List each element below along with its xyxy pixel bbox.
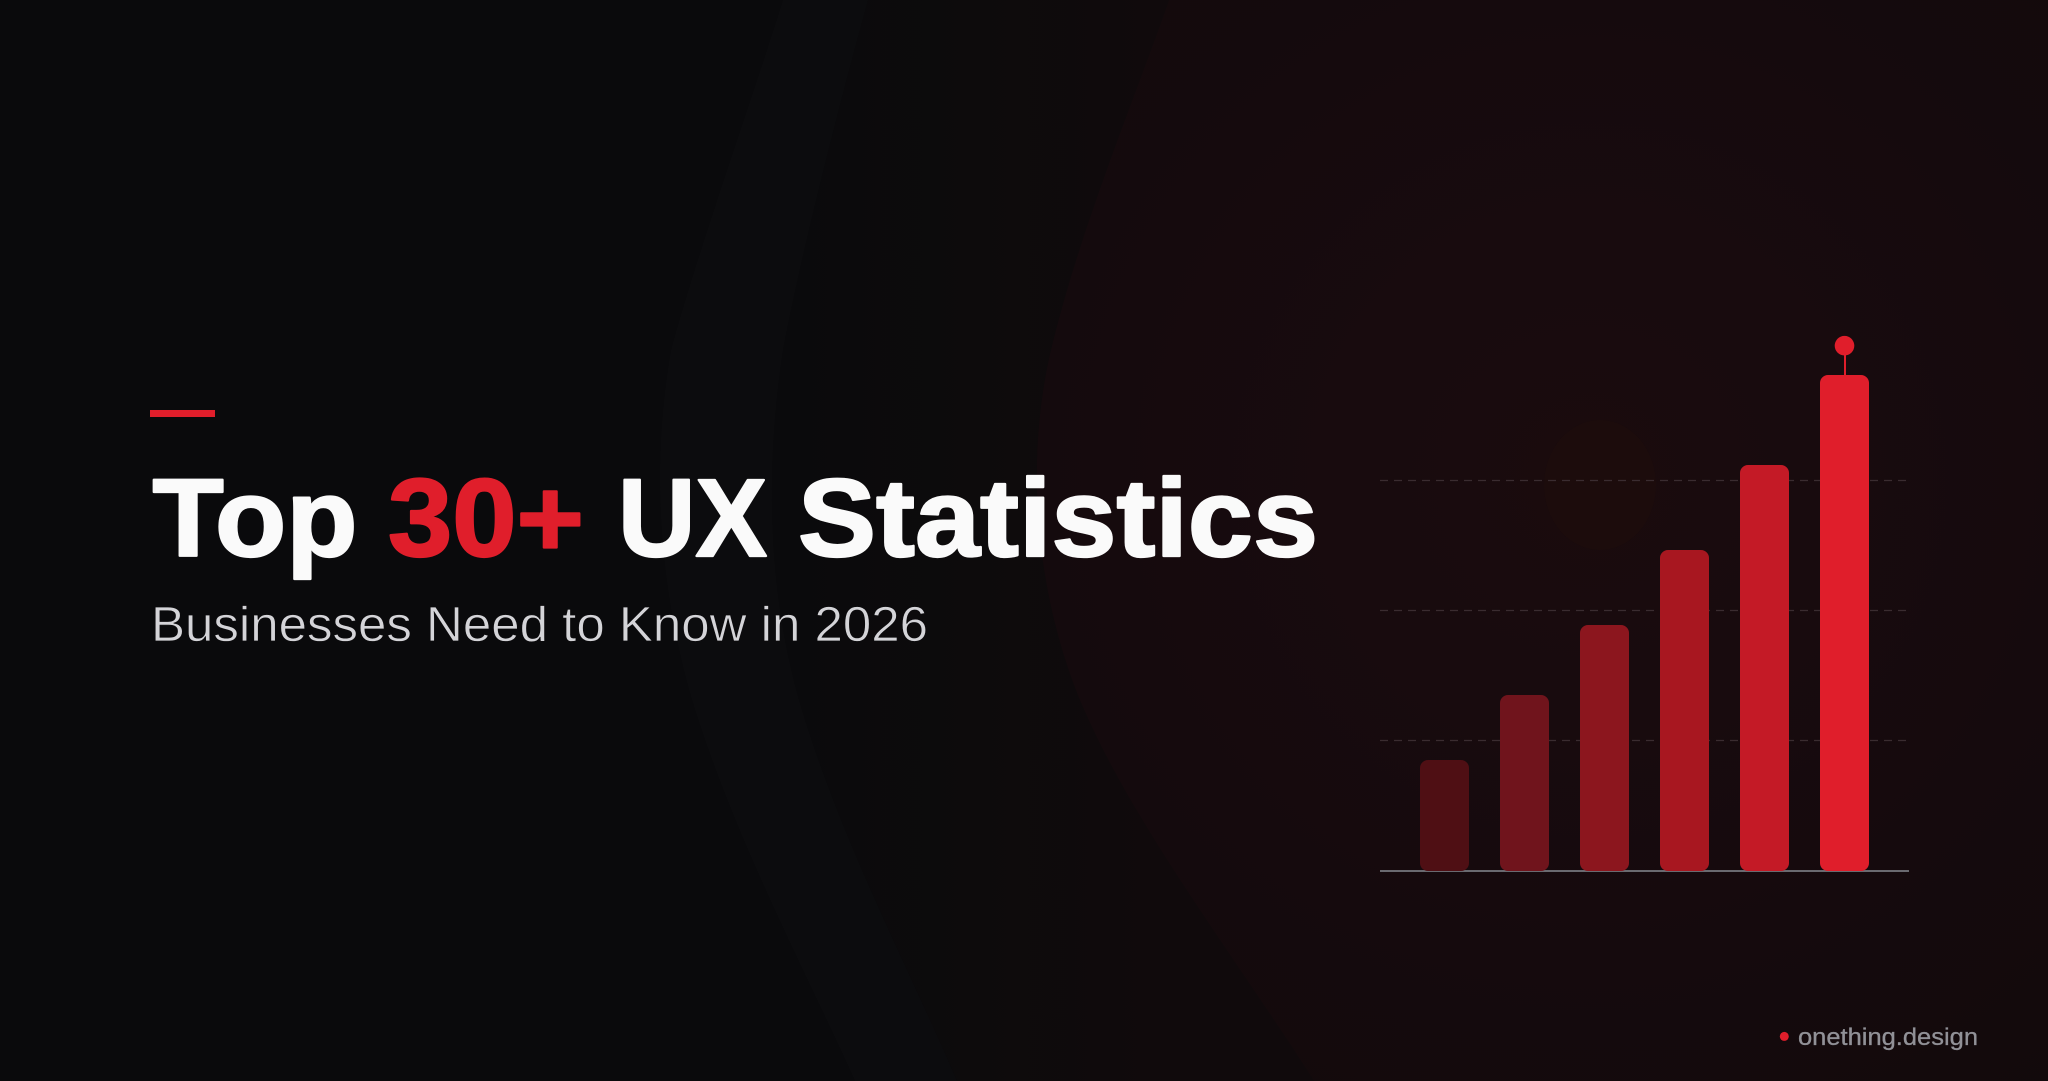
bar 3 [1580,625,1629,871]
axis line [1380,870,1909,872]
bar 4 [1660,550,1709,871]
title: Statistics [798,457,1318,580]
title: Top [152,457,358,580]
subtitle: Businesses Need to Know in 2026 [151,597,928,652]
title: 30+ [388,457,584,580]
bar chart [1380,336,1909,872]
peak marker [1835,336,1854,376]
title: UX [618,457,767,580]
bar 5 [1740,465,1789,871]
bar 1 [1420,760,1469,871]
bar 6 [1820,375,1869,871]
title [152,457,1318,580]
brand footer: onething.design [1798,1024,1978,1051]
bar 2 [1500,695,1549,871]
accent bar [150,410,215,417]
